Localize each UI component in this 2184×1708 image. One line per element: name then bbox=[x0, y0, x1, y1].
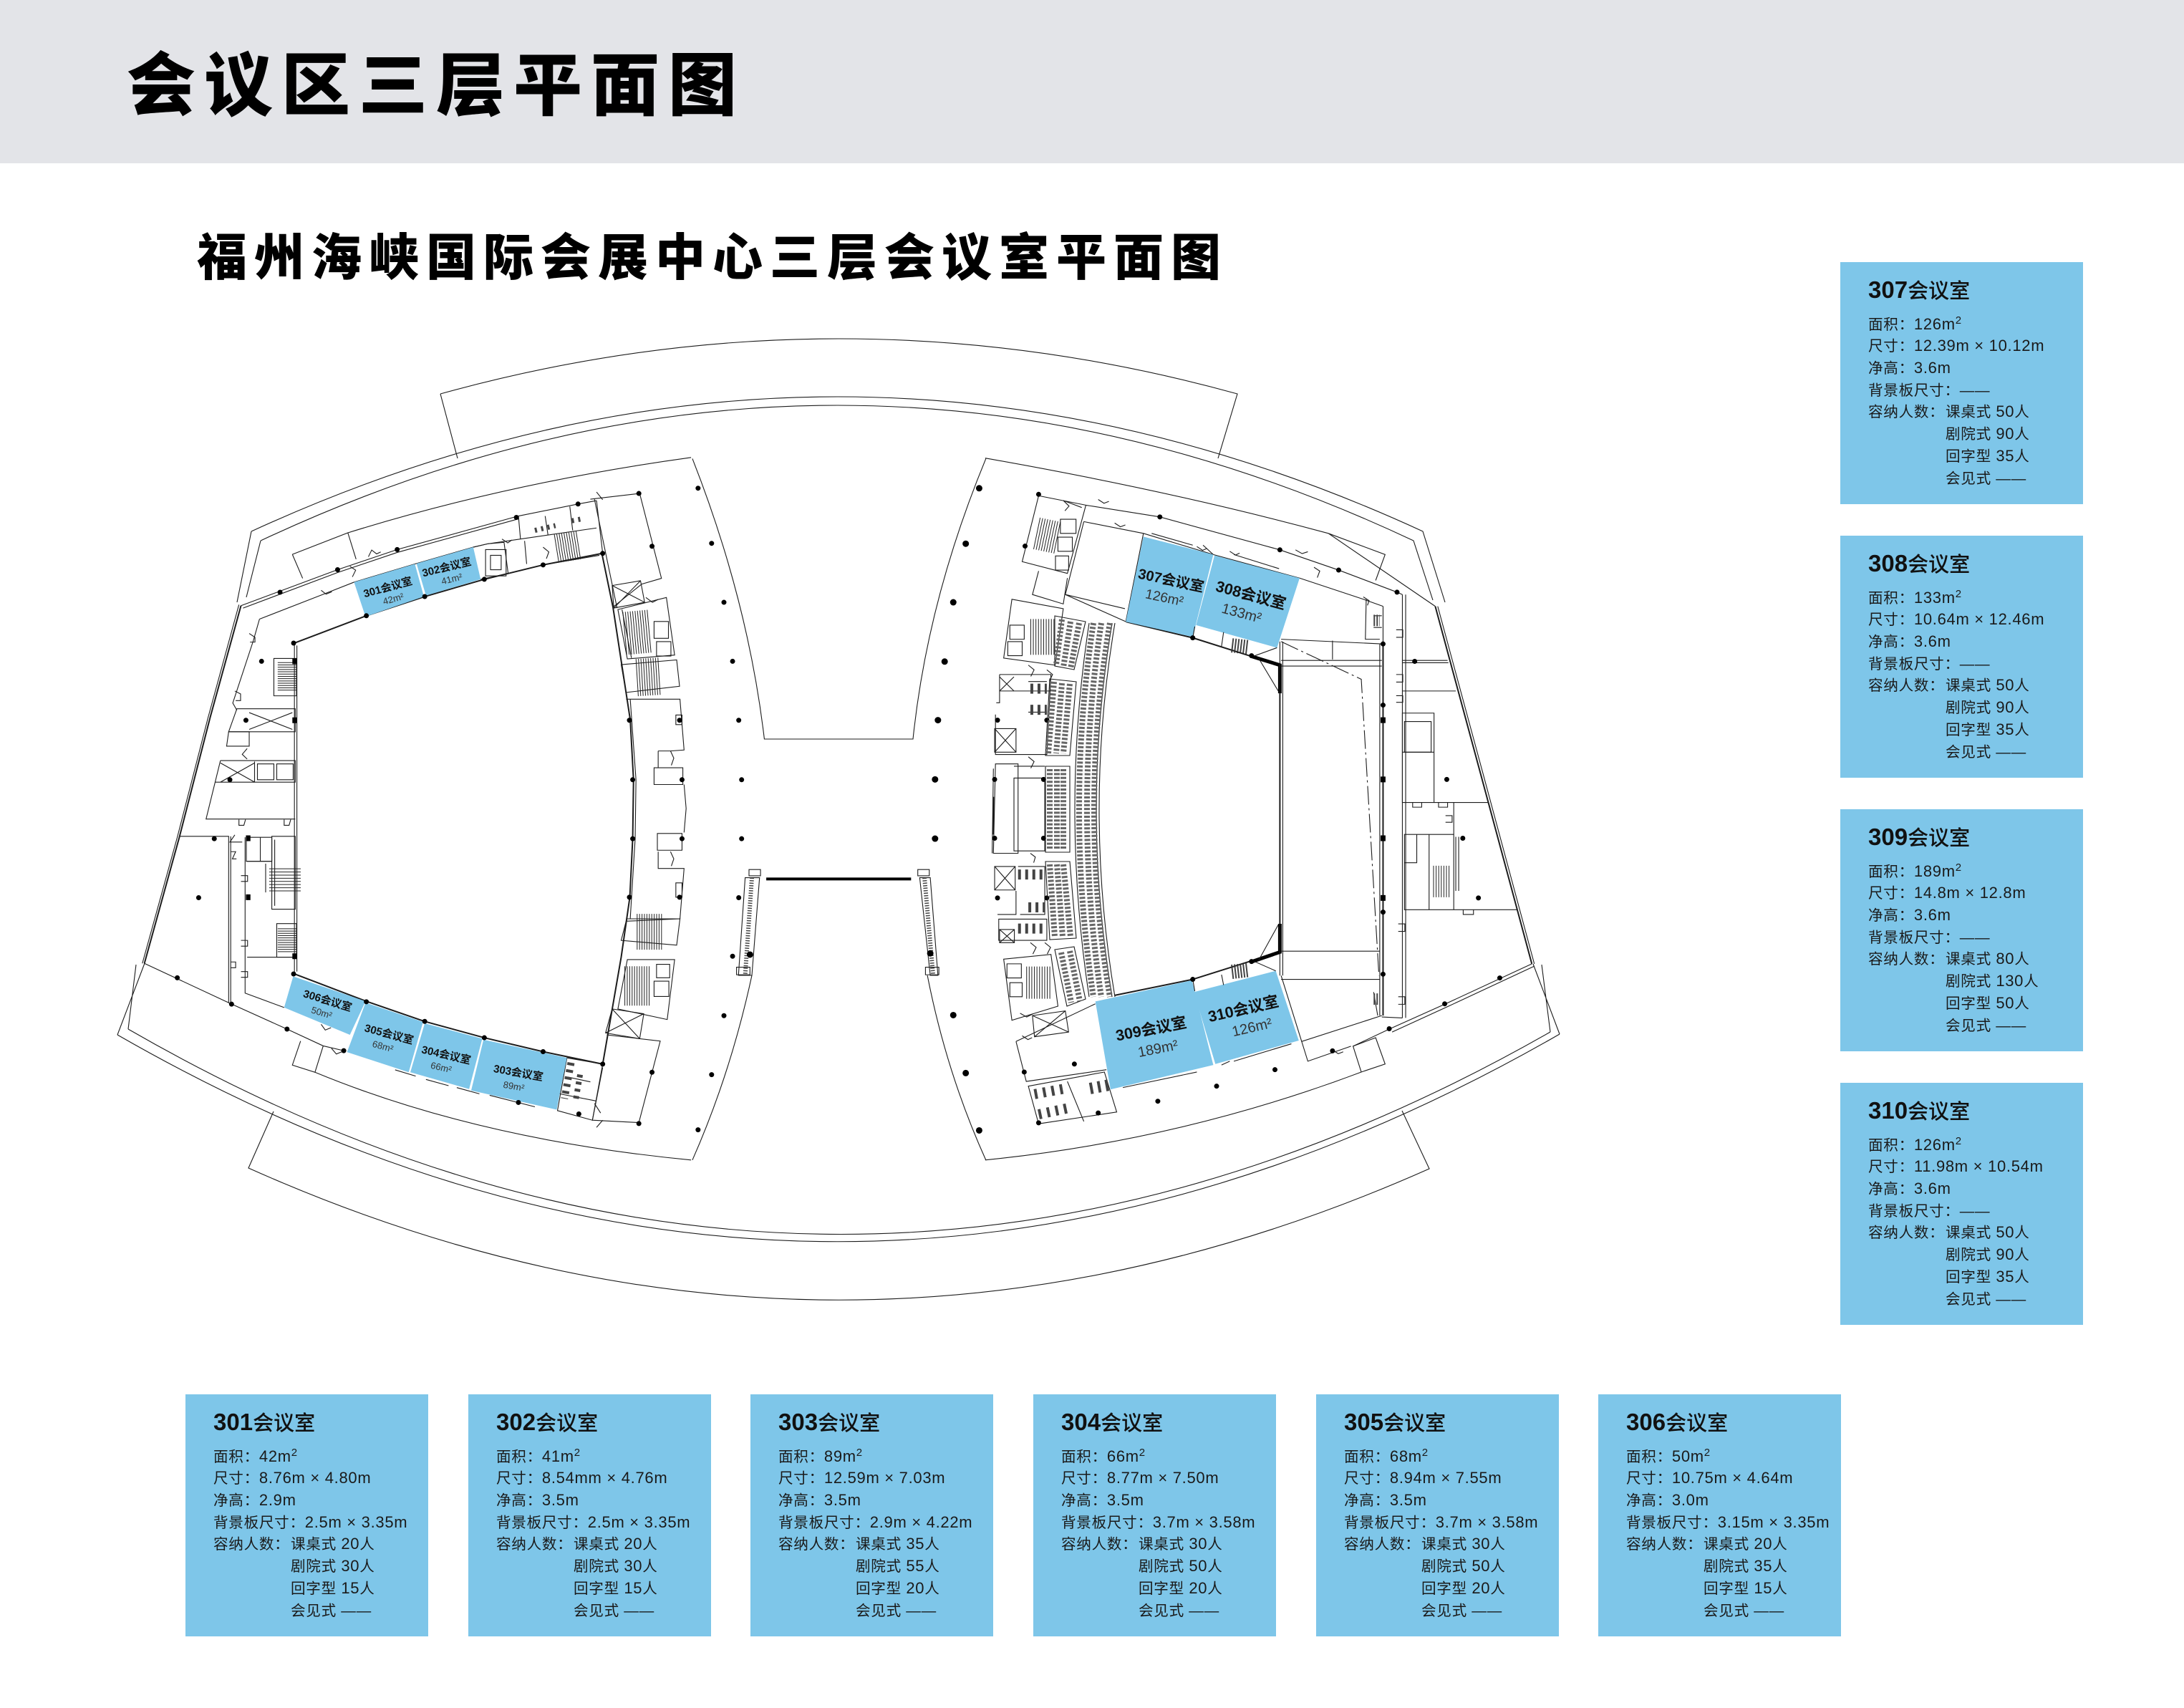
rooms bbox=[1126, 536, 1213, 637]
panel: room 303: 回字型 20人 bbox=[856, 1579, 939, 1597]
panel: room 303: 背景板尺寸：2.9m × 4.22m bbox=[778, 1513, 972, 1531]
label: room 304: 66m² bbox=[430, 1060, 453, 1075]
panel: room 306: 背景板尺寸：3.15m × 3.35m bbox=[1626, 1513, 1830, 1531]
panel: room 307: 课桌式 50人 bbox=[1946, 402, 2029, 420]
label: room 303 bbox=[491, 1062, 544, 1096]
label: room 310: 126m² bbox=[1230, 1015, 1274, 1040]
label: room 302: 41m² bbox=[440, 571, 464, 587]
panel: room 308: 会见式 —— bbox=[1946, 743, 2026, 761]
panel: room 309 bbox=[1840, 809, 2083, 1051]
panel: room 306 bbox=[1598, 1394, 1841, 1636]
panel: room 308: 308会议室 bbox=[1868, 548, 1970, 578]
outer canopies and arcs bbox=[117, 339, 1560, 1300]
panel: room 301: 剧院式 30人 bbox=[291, 1557, 375, 1575]
label: room 307 bbox=[1133, 565, 1206, 613]
panel: room 307: 净高：3.6m bbox=[1868, 359, 1951, 377]
east lobby bbox=[626, 699, 684, 919]
panel: room 303: 容纳人数： bbox=[778, 1536, 854, 1553]
south-east toilet bbox=[558, 1058, 603, 1120]
panel: room 301: 回字型 15人 bbox=[291, 1579, 375, 1597]
panel: room 309: 课桌式 80人 bbox=[1946, 950, 2029, 968]
theatre seating bbox=[1045, 616, 1115, 1006]
escalators bbox=[737, 869, 939, 975]
label: room 308: 133m² bbox=[1220, 601, 1263, 627]
panel: room 301: 301会议室 bbox=[213, 1407, 315, 1437]
panel: room 307: 307会议室 bbox=[1868, 274, 1970, 304]
label: room 305 bbox=[360, 1021, 415, 1058]
panel: room 306: 课桌式 20人 bbox=[1704, 1535, 1787, 1553]
panel: room 308: 面积：133m2 bbox=[1868, 588, 1962, 607]
panel: room 305: 课桌式 30人 bbox=[1421, 1535, 1505, 1553]
panel: room 310: 容纳人数： bbox=[1868, 1225, 1944, 1241]
north-east room bbox=[590, 492, 662, 608]
panel: room 305: 面积：68m2 bbox=[1344, 1447, 1429, 1465]
panel: room 309: 容纳人数： bbox=[1868, 951, 1944, 968]
panel: room 307: 背景板尺寸：—— bbox=[1868, 382, 1990, 399]
panel: room 309: 剧院式 130人 bbox=[1946, 972, 2039, 990]
panel: room 308 bbox=[1840, 536, 2083, 778]
panel: room 308: 背景板尺寸：—— bbox=[1868, 656, 1990, 672]
panel: room 301: 课桌式 20人 bbox=[291, 1535, 375, 1553]
panel: room 304: 背景板尺寸：3.7m × 3.58m bbox=[1061, 1513, 1255, 1531]
panel: room 301: 面积：42m2 bbox=[213, 1447, 298, 1465]
west rooms bbox=[274, 658, 296, 696]
panel: room 304: 课桌式 30人 bbox=[1139, 1535, 1222, 1553]
label: room 306 bbox=[298, 987, 354, 1026]
panel: room 306: 面积：50m2 bbox=[1626, 1447, 1711, 1465]
label: room 305: 305会议室 bbox=[363, 1021, 415, 1047]
label: room 308 bbox=[1209, 577, 1288, 632]
panel: room 306: 回字型 15人 bbox=[1704, 1579, 1787, 1597]
panel: room 310 bbox=[1840, 1083, 2083, 1325]
north-west core bbox=[1022, 496, 1086, 574]
panel: room 302: 尺寸：8.54mm × 4.76m bbox=[496, 1469, 667, 1487]
columns bbox=[178, 488, 742, 1130]
left wing walls bbox=[142, 458, 742, 1160]
panel: room 307: 尺寸：12.39m × 10.12m bbox=[1868, 337, 2044, 354]
panel: room 301: 尺寸：8.76m × 4.80m bbox=[213, 1469, 371, 1487]
panel: room 304: 容纳人数： bbox=[1061, 1536, 1137, 1553]
central hall outline and columns bbox=[692, 458, 986, 1160]
panel: room 308: 回字型 35人 bbox=[1946, 720, 2029, 738]
panel: room 304: 剧院式 50人 bbox=[1139, 1557, 1222, 1575]
label: room 301: 301会议室 bbox=[362, 574, 414, 600]
panel: room 306: 容纳人数： bbox=[1626, 1536, 1702, 1553]
panel: room 303 bbox=[750, 1394, 993, 1636]
panel: room 307: 剧院式 90人 bbox=[1946, 425, 2029, 443]
room labels bbox=[298, 555, 1288, 1096]
panel: room 309: 面积：189m2 bbox=[1868, 862, 1962, 880]
label: room 302 bbox=[421, 555, 475, 591]
right wing walls bbox=[985, 458, 1535, 1160]
panel: room 302: 302会议室 bbox=[496, 1407, 598, 1437]
stage and hall bbox=[1115, 622, 1252, 995]
small stairs bbox=[1232, 645, 1248, 972]
panel: room 304: 净高：3.5m bbox=[1061, 1491, 1144, 1509]
panel: room 302: 回字型 15人 bbox=[574, 1579, 657, 1597]
label: room 301: 42m² bbox=[382, 591, 405, 607]
panel: room 302: 容纳人数： bbox=[496, 1536, 572, 1553]
panel: room 304 bbox=[1033, 1394, 1276, 1636]
title: 会议区三层平面图 bbox=[127, 30, 745, 130]
meeting lobby bbox=[992, 764, 1045, 854]
panel: room 302: 剧院式 30人 bbox=[574, 1557, 657, 1575]
panel: room 310: 面积：126m2 bbox=[1868, 1135, 1962, 1154]
panel: room 304: 304会议室 bbox=[1061, 1407, 1163, 1437]
panel: room 302: 会见式 —— bbox=[574, 1603, 654, 1618]
label: room 308: 308会议室 bbox=[1214, 577, 1288, 613]
panel: room 303: 净高：3.5m bbox=[778, 1491, 861, 1509]
panel: room 305: 305会议室 bbox=[1344, 1407, 1446, 1437]
panel: room 303: 剧院式 55人 bbox=[856, 1557, 939, 1575]
panel: room 307: 回字型 35人 bbox=[1946, 447, 2029, 465]
panel: room 310: 310会议室 bbox=[1868, 1095, 1970, 1125]
panel: room 308: 容纳人数： bbox=[1868, 677, 1944, 694]
panel: room 306: 净高：3.0m bbox=[1626, 1491, 1709, 1509]
panel: room 305: 容纳人数： bbox=[1344, 1536, 1420, 1553]
panel: room 310: 回字型 35人 bbox=[1946, 1268, 2029, 1285]
panel: room 309: 尺寸：14.8m × 12.8m bbox=[1868, 884, 2026, 902]
panel: room 307: 面积：126m2 bbox=[1868, 314, 1962, 333]
panel: room 310: 尺寸：11.98m × 10.54m bbox=[1868, 1157, 2044, 1175]
panel: room 301: 容纳人数： bbox=[213, 1536, 289, 1553]
panel: room 306: 会见式 —— bbox=[1704, 1603, 1784, 1618]
panel: room 307: 容纳人数： bbox=[1868, 404, 1944, 420]
panel: room 307 bbox=[1840, 262, 2083, 504]
label: room 304: 304会议室 bbox=[420, 1043, 472, 1067]
partition ticks bbox=[1123, 534, 1291, 1088]
panel: room 302: 净高：3.5m bbox=[496, 1491, 579, 1509]
panel: room 301 bbox=[185, 1394, 428, 1636]
panel: room 302: 背景板尺寸：2.5m × 3.35m bbox=[496, 1513, 690, 1531]
panel: room 306: 剧院式 35人 bbox=[1704, 1557, 1787, 1575]
panel: room 308: 课桌式 50人 bbox=[1946, 676, 2029, 694]
panel: room 310: 净高：3.6m bbox=[1868, 1179, 1951, 1197]
panel: room 306: 306会议室 bbox=[1626, 1407, 1728, 1437]
east side rooms bbox=[1402, 594, 1456, 1018]
panel: room 309: 净高：3.6m bbox=[1868, 906, 1951, 924]
label: room 309: 189m² bbox=[1136, 1038, 1179, 1061]
label: room 309: 309会议室 bbox=[1114, 1013, 1188, 1044]
panel: room 309: 会见式 —— bbox=[1946, 1017, 2026, 1034]
panel: room 306: 尺寸：10.75m × 4.64m bbox=[1626, 1469, 1793, 1487]
label: room 306: 50m² bbox=[310, 1005, 334, 1021]
panel: room 310: 背景板尺寸：—— bbox=[1868, 1203, 1990, 1220]
label: room 307: 307会议室 bbox=[1136, 565, 1206, 596]
panel: room 305: 背景板尺寸：3.7m × 3.58m bbox=[1344, 1513, 1538, 1531]
label: room 305: 68m² bbox=[371, 1038, 395, 1054]
panel: room 304: 回字型 20人 bbox=[1139, 1579, 1222, 1597]
panel: room 309: 背景板尺寸：—— bbox=[1868, 930, 1990, 946]
panel: room 307: 会见式 —— bbox=[1946, 470, 2026, 487]
panel: room 305: 回字型 20人 bbox=[1421, 1579, 1505, 1597]
panel: room 310: 课桌式 50人 bbox=[1946, 1223, 2029, 1241]
atrium bbox=[294, 554, 634, 1064]
north door marks bbox=[350, 539, 658, 602]
label: room 306: 306会议室 bbox=[301, 987, 354, 1014]
panel: room 303: 面积：89m2 bbox=[778, 1447, 863, 1465]
header band bbox=[0, 0, 2184, 163]
panel: room 305 bbox=[1316, 1394, 1559, 1636]
panel: room 303: 课桌式 35人 bbox=[856, 1535, 939, 1553]
label: room 309 bbox=[1114, 1013, 1192, 1064]
south partition ticks bbox=[367, 1058, 535, 1106]
panel: room 308: 净高：3.6m bbox=[1868, 632, 1951, 650]
panel: room 302 bbox=[468, 1394, 711, 1636]
panel: room 301: 净高：2.9m bbox=[213, 1491, 296, 1509]
panel: room 304: 尺寸：8.77m × 7.50m bbox=[1061, 1469, 1219, 1487]
panel: room 305: 剧院式 50人 bbox=[1421, 1557, 1505, 1575]
panel: room 303: 会见式 —— bbox=[856, 1603, 937, 1618]
door marks bbox=[1020, 500, 1369, 1053]
label: room 303: 89m² bbox=[503, 1079, 526, 1094]
panel: room 301: 会见式 —— bbox=[291, 1603, 372, 1618]
label: room 310 bbox=[1207, 992, 1285, 1044]
south-west core bbox=[995, 867, 1015, 890]
panel: room 308: 尺寸：10.64m × 12.46m bbox=[1868, 610, 2044, 628]
door marks bbox=[230, 590, 342, 1054]
panel: room 302: 课桌式 20人 bbox=[574, 1535, 657, 1553]
south-east core bbox=[622, 919, 680, 945]
panel: room 305: 尺寸：8.94m × 7.55m bbox=[1344, 1469, 1502, 1487]
panel: room 304: 面积：66m2 bbox=[1061, 1447, 1146, 1465]
label: room 304 bbox=[417, 1043, 472, 1079]
panel: room 308: 剧院式 90人 bbox=[1946, 698, 2029, 716]
label: room 302: 302会议室 bbox=[421, 555, 473, 579]
panel: room 303: 303会议室 bbox=[778, 1407, 880, 1437]
label: room 310: 310会议室 bbox=[1207, 992, 1280, 1026]
label: room 303: 303会议室 bbox=[493, 1062, 544, 1084]
panel: room 310: 剧院式 90人 bbox=[1946, 1245, 2029, 1263]
panel: room 301: 背景板尺寸：2.5m × 3.35m bbox=[213, 1513, 407, 1531]
panel: room 309: 309会议室 bbox=[1868, 821, 1970, 851]
label: room 301 bbox=[362, 574, 417, 612]
panel: room 303: 尺寸：12.59m × 7.03m bbox=[778, 1469, 945, 1487]
subtitle: 福州海峡国际会展中心三层会议室平面图 bbox=[197, 218, 1228, 290]
panel: room 309: 回字型 50人 bbox=[1946, 994, 2029, 1012]
panel: room 304: 会见式 —— bbox=[1139, 1603, 1219, 1618]
panel: room 305: 净高：3.5m bbox=[1344, 1491, 1427, 1509]
rooms bbox=[354, 564, 424, 617]
north services bbox=[518, 501, 603, 565]
panel: room 310: 会见式 —— bbox=[1946, 1290, 2026, 1308]
label: room 307: 126m² bbox=[1144, 587, 1185, 609]
columns bbox=[995, 494, 1499, 1123]
panel: room 302: 面积：41m2 bbox=[496, 1447, 581, 1465]
panel: room 305: 会见式 —— bbox=[1421, 1603, 1502, 1618]
